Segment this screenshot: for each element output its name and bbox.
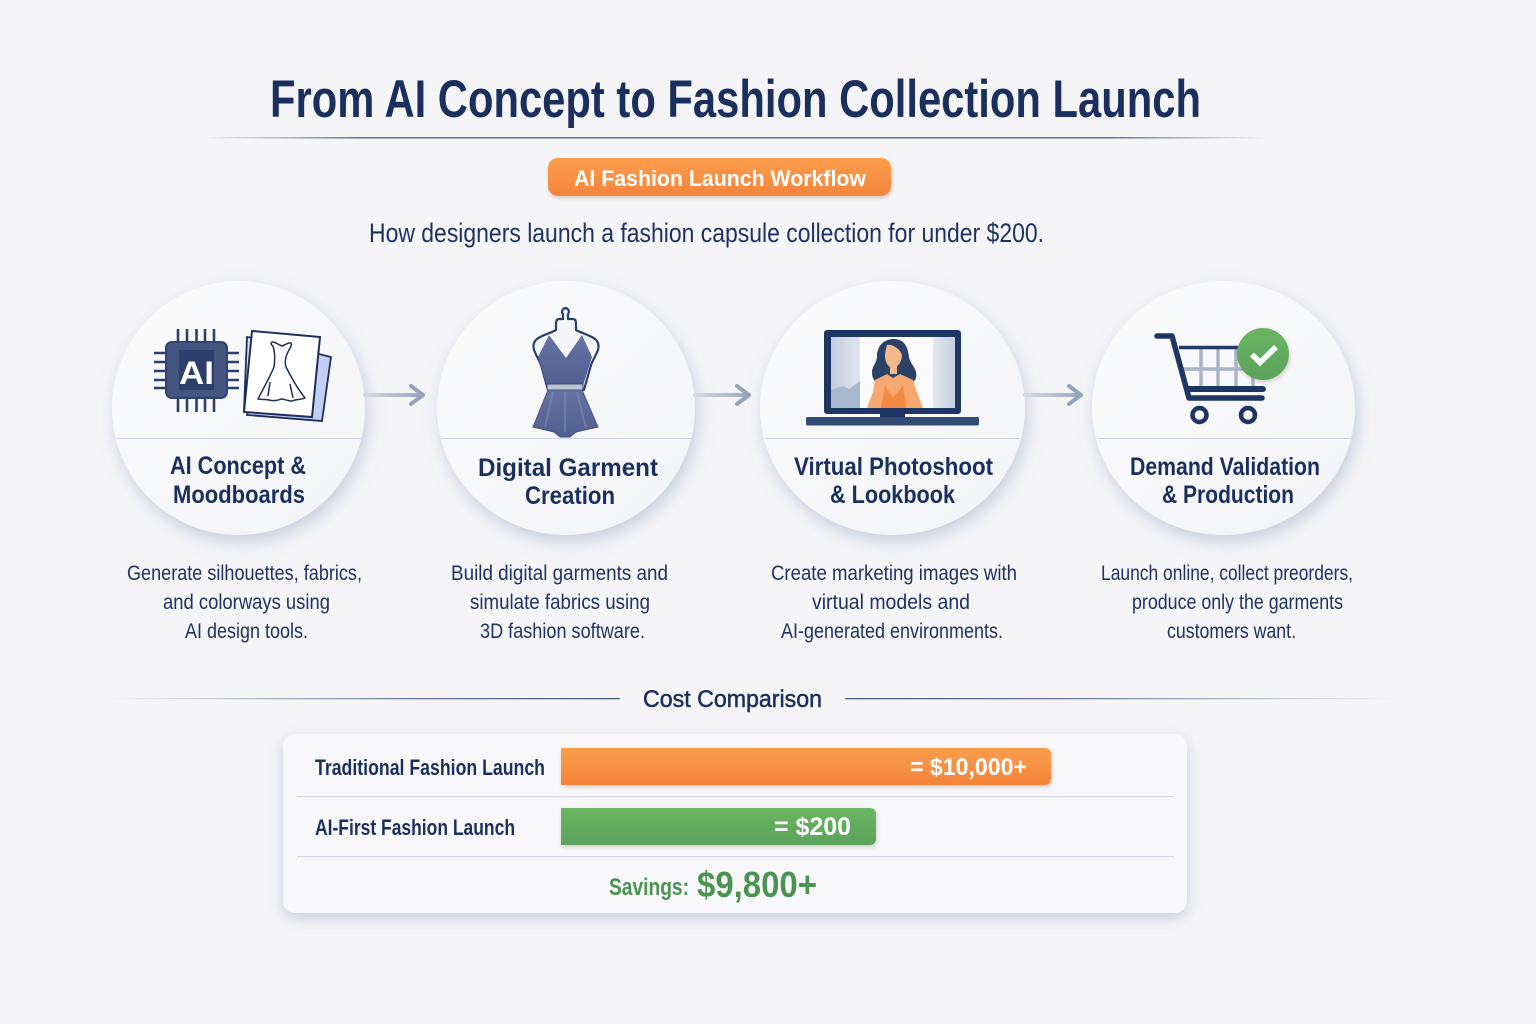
step 3 title: Virtual Photoshoot — [794, 453, 994, 481]
arrow 1 — [365, 386, 423, 404]
step 1 title: Moodboards — [173, 481, 305, 509]
step 2 title — [478, 454, 659, 510]
step 2 title: Creation — [525, 482, 615, 510]
bar: traditional cost: = $10,000+ — [910, 754, 1027, 781]
step 3: virtual photoshoot and lookbook — [760, 281, 1025, 535]
step 4 title — [1130, 453, 1320, 509]
description: step 3: virtual models and — [812, 591, 970, 614]
description: step 3: Create marketing images with — [771, 562, 1017, 585]
step 1 disc — [112, 281, 365, 535]
icon: moodboard sheets with dress sketch — [244, 331, 331, 421]
icon: laptop with virtual model — [806, 330, 979, 426]
badge: workflow: AI Fashion Launch Workflow — [574, 166, 867, 191]
description: step 1: Generate silhouettes, fabrics, — [127, 562, 362, 585]
description: step 1 — [127, 562, 362, 643]
step 4 title: & Production — [1162, 481, 1294, 509]
description: step 1: and colorways using — [163, 591, 330, 614]
step 3 title — [794, 453, 994, 509]
step 2 title: Digital Garment — [478, 454, 659, 482]
subtitle: How designers launch a fashion capsule collection for under $200. — [369, 218, 1044, 248]
arrow 3 — [1025, 386, 1081, 404]
step 3 title: & Lookbook — [830, 481, 955, 509]
savings — [609, 864, 817, 905]
savings: Savings: — [609, 874, 689, 901]
description: step 3 — [771, 562, 1017, 643]
label: AI-first: AI-First Fashion Launch — [315, 815, 515, 840]
step 2: digital garment creation — [437, 281, 695, 535]
savings: $9,800+ — [697, 864, 817, 905]
description: step 2 — [451, 562, 668, 643]
description: step 1: AI design tools. — [185, 620, 308, 643]
panel: cost comparison — [283, 734, 1187, 913]
section heading: cost comparison: Cost Comparison — [643, 686, 822, 713]
icon: AI chip: AI — [179, 355, 214, 391]
badge: workflow — [548, 158, 891, 196]
description: step 2: simulate fabrics using — [470, 591, 650, 614]
icon: AI chip — [154, 329, 239, 412]
description: step 2: Build digital garments and — [451, 562, 668, 585]
step 2 disc — [437, 281, 695, 535]
step 4 title: Demand Validation — [1130, 453, 1320, 481]
description: step 4: produce only the garments — [1132, 591, 1343, 614]
step 3 disc — [760, 281, 1025, 535]
description: step 4: customers want. — [1167, 620, 1296, 643]
description: step 3: AI-generated environments. — [781, 620, 1003, 643]
step 1 title — [170, 452, 306, 509]
title: From AI Concept to Fashion Collection Launch — [270, 70, 1201, 129]
step 4 disc — [1092, 281, 1355, 535]
step 4: demand validation and production — [1092, 281, 1355, 535]
bar: traditional cost — [561, 748, 1051, 785]
step 1: AI concept and moodboards — [112, 281, 365, 535]
bar: AI-first cost — [561, 808, 876, 845]
icon: shopping cart with check — [1157, 328, 1289, 422]
arrow 2 — [695, 386, 749, 404]
bar: AI-first cost: = $200 — [774, 813, 851, 841]
step 1 title: AI Concept & — [170, 452, 306, 480]
icon: mannequin with dress — [533, 308, 599, 437]
label: traditional: Traditional Fashion Launch — [315, 755, 545, 780]
description: step 4: Launch online, collect preorders, — [1101, 562, 1353, 585]
description: step 2: 3D fashion software. — [480, 620, 645, 643]
description: step 4 — [1101, 562, 1353, 643]
